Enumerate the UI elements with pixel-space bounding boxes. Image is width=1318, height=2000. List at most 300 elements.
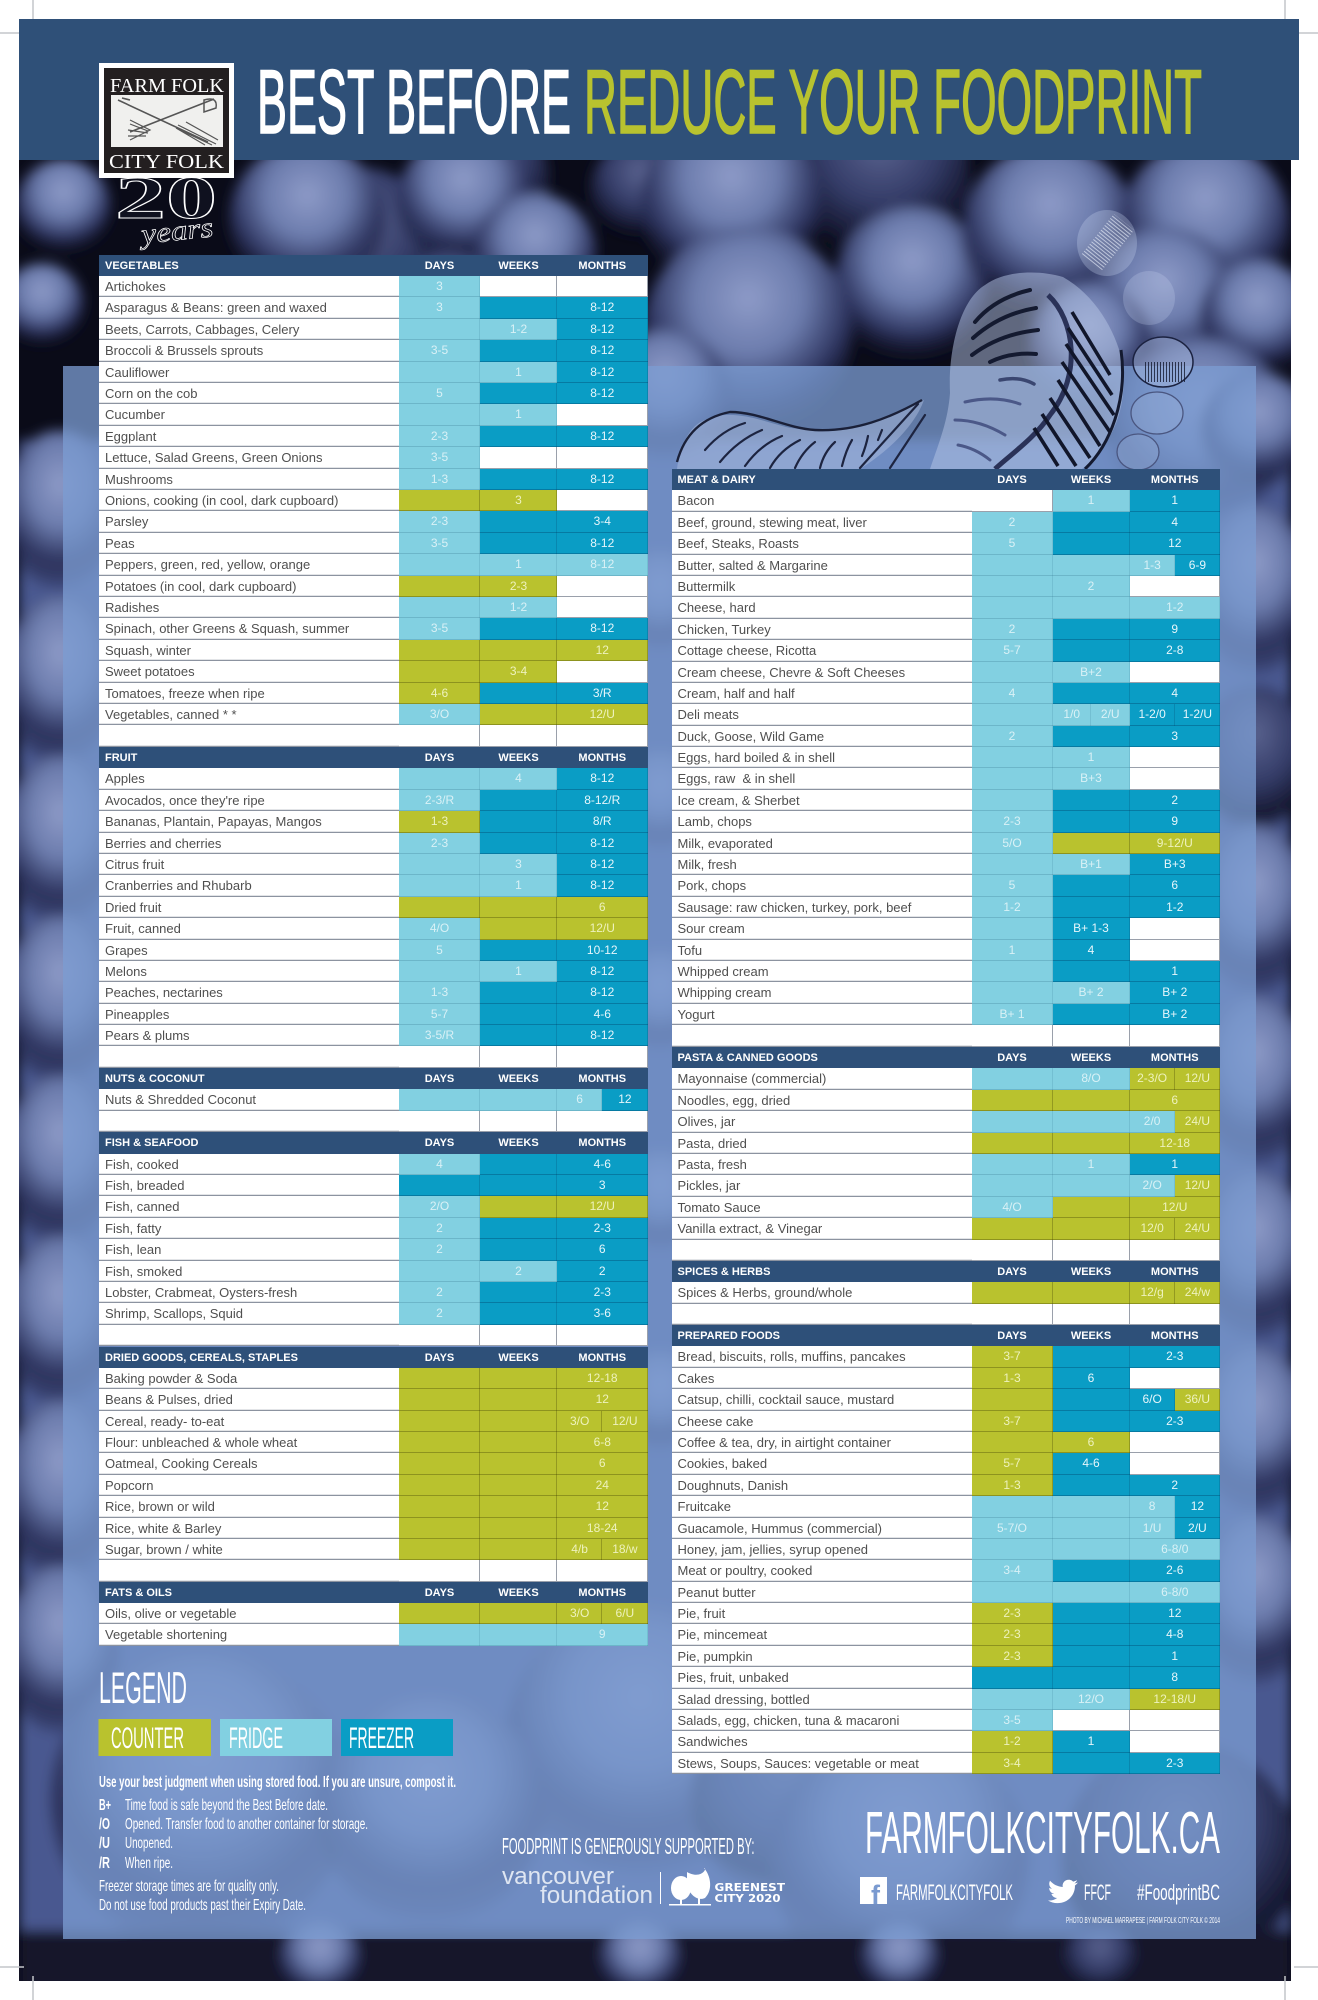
header: nuts: WEEKS <box>498 1073 539 1085</box>
row: oatmeal: Oatmeal, Cooking Cereals <box>105 1456 257 1471</box>
row: bananas <box>99 811 648 833</box>
row: beef ground <box>672 512 1220 533</box>
row: potatoes: 2-3 <box>510 579 527 593</box>
row: pasta fresh: 1 <box>1171 1157 1178 1171</box>
row: mushrooms: Mushrooms <box>105 472 173 487</box>
row: salad dressing: 12/O <box>1078 1692 1104 1706</box>
row: lettuce: 3-5 <box>431 450 448 464</box>
legend notes: /R <box>99 1855 110 1872</box>
row: peaches: 8-12 <box>590 985 614 999</box>
row: squash: Squash, winter <box>105 643 191 658</box>
row: onions <box>99 490 648 511</box>
row: corn: 5 <box>436 386 443 400</box>
row: berries <box>99 833 648 854</box>
row: pickles: 2/O <box>1142 1178 1162 1192</box>
header: pasta: MONTHS <box>1151 1052 1199 1064</box>
row: fish canned: Fish, canned <box>105 1199 179 1214</box>
row: cream: 4 <box>1171 686 1178 700</box>
row: broccoli: 8-12 <box>590 343 614 357</box>
header: meat and dairy: MEAT & DAIRY <box>678 474 756 486</box>
row: pineapples <box>99 1004 648 1025</box>
header: fish: MONTHS <box>578 1137 626 1149</box>
row: cream cheese <box>672 662 1220 683</box>
row: parsley: 3-4 <box>594 514 611 528</box>
header: fats: FATS & OILS <box>105 1587 172 1599</box>
row: tomatoes: 4-6 <box>431 686 448 700</box>
row: mayonnaise: Mayonnaise (commercial) <box>678 1071 826 1086</box>
row: noodles <box>672 1090 1220 1111</box>
icon: twitter <box>1048 1880 1078 1903</box>
row: beef steaks: 5 <box>1009 536 1015 550</box>
header: fruit: MONTHS <box>578 752 626 764</box>
row: fruitcake: 12 <box>1191 1499 1204 1513</box>
row: pears: 3-5/R <box>425 1028 454 1042</box>
row: cream: Cream, half and half <box>678 686 795 701</box>
row: lamb: 9 <box>1171 814 1178 828</box>
row: olives: 24/U <box>1185 1114 1210 1128</box>
row: doughnuts <box>672 1475 1220 1496</box>
row: shortening <box>99 1624 648 1646</box>
header: prepared foods: DAYS <box>997 1330 1027 1342</box>
row: cookies <box>672 1453 1220 1475</box>
row: doughnuts: 2 <box>1171 1478 1178 1492</box>
header: spices: SPICES & HERBS <box>678 1266 770 1278</box>
row: eggs raw: B+3 <box>1080 771 1102 785</box>
row: bananas: Bananas, Plantain, Papayas, Mangos <box>105 814 322 829</box>
header: prepared foods: PREPARED FOODS <box>678 1330 780 1342</box>
row: broccoli <box>99 340 648 362</box>
row: ice cream: 2 <box>1171 793 1178 807</box>
row: grapes: 10-12 <box>587 943 618 957</box>
row: cereal: 12/U <box>612 1414 638 1428</box>
row: baking powder: Baking powder & Soda <box>105 1371 237 1386</box>
header: dried goods: MONTHS <box>578 1352 626 1364</box>
table: dried goods <box>99 1346 648 1582</box>
row: butter: 1-3 <box>1143 558 1161 572</box>
row: cakes: Cakes <box>678 1371 714 1386</box>
header: fruit: WEEKS <box>498 752 539 764</box>
row: radishes <box>99 597 648 618</box>
header: dried goods: WEEKS <box>498 1352 539 1364</box>
row: citrus: Citrus fruit <box>105 857 164 872</box>
row: mushrooms: 8-12 <box>590 472 614 486</box>
row: apples: 8-12 <box>590 771 614 785</box>
row: tomato sauce: 12/U <box>1162 1200 1187 1214</box>
row: citrus: 8-12 <box>590 857 614 871</box>
header: pasta: DAYS <box>997 1052 1027 1064</box>
row: coffee: 6 <box>1088 1435 1094 1449</box>
row: cereal <box>99 1411 648 1432</box>
header: vegetables: VEGETABLES <box>105 260 179 272</box>
row: fish smoked: 2 <box>599 1264 606 1278</box>
row: baking powder: 12-18 <box>587 1371 618 1385</box>
row: pie mincemeat: 4-8 <box>1166 1627 1183 1641</box>
row: ice cream <box>672 790 1220 811</box>
legend notes: Unopened. <box>125 1835 173 1852</box>
row: asparagus: 8-12 <box>590 300 614 314</box>
header: meat and dairy: MONTHS <box>1151 474 1199 486</box>
header: pasta: WEEKS <box>1071 1052 1111 1064</box>
row: pie pumpkin: 1 <box>1171 1649 1178 1663</box>
row: peaches: Peaches, nectarines <box>105 985 223 1000</box>
row: pies unbaked <box>672 1667 1220 1689</box>
table: spices and herbs <box>672 1261 1220 1325</box>
row: eggplant: 2-3 <box>431 429 448 443</box>
header: fats: WEEKS <box>498 1587 539 1599</box>
row: melons: 1 <box>515 964 522 978</box>
row: bacon: Bacon <box>678 493 714 508</box>
row: guacamole: 2/U <box>1188 1521 1207 1535</box>
row: pineapples: Pineapples <box>105 1007 169 1022</box>
row: tofu: 4 <box>1088 943 1094 957</box>
row: sandwiches: Sandwiches <box>678 1734 748 1749</box>
row: fruit canned <box>99 918 648 940</box>
row: beef steaks: Beef, Steaks, Roasts <box>678 536 799 551</box>
row: rice white <box>99 1518 648 1539</box>
legend notes <box>99 1774 456 1914</box>
row: sweet potatoes <box>99 661 648 683</box>
row: potatoes: Potatoes (in cool, dark cupboard) <box>105 579 296 594</box>
row: olives <box>672 1111 1220 1133</box>
icon: crossed fork and spade <box>118 98 218 145</box>
row: fish fatty: 2-3 <box>594 1221 611 1235</box>
row: pork: 6 <box>1171 878 1178 892</box>
row: duck: 3 <box>1171 729 1178 743</box>
row: melons <box>99 961 648 982</box>
row: ice cream: Ice cream, & Sherbet <box>678 793 800 808</box>
row: cauliflower: Cauliflower <box>105 365 169 380</box>
header: fish: DAYS <box>425 1137 454 1149</box>
row: fish lean: 6 <box>599 1242 606 1256</box>
row: apples <box>99 768 648 790</box>
row: cottage cheese: Cottage cheese, Ricotta <box>678 643 816 658</box>
row: eggs hard: 1 <box>1088 750 1094 764</box>
row: cottage cheese: 5-7 <box>1003 643 1021 657</box>
row: asparagus: Asparagus & Beans: green and waxed <box>105 300 327 315</box>
row: eggplant <box>99 426 648 447</box>
row: buttermilk: 2 <box>1088 579 1094 593</box>
header band <box>19 19 1299 160</box>
row: vanilla: Vanilla extract, & Vinegar <box>678 1221 822 1236</box>
footer: supporters and contact: FFCF <box>1084 1880 1111 1905</box>
row: bread: 3-7 <box>1003 1349 1021 1363</box>
row: rice brown: 12 <box>596 1499 609 1513</box>
row: vegetables canned: 3/O <box>430 707 449 721</box>
row: bacon <box>672 490 1220 512</box>
legend key: counter <box>98 1719 211 1756</box>
legend notes: Do not use food products past their Expiry Date. <box>99 1897 306 1914</box>
row: noodles: 6 <box>1171 1093 1178 1107</box>
row: sugar: 18/w <box>612 1542 638 1556</box>
legend notes: When ripe. <box>125 1855 173 1872</box>
row: beef steaks <box>672 533 1220 555</box>
row: spinach: 8-12 <box>590 621 614 635</box>
row: fish canned: 12/U <box>590 1199 615 1213</box>
row: cheese hard <box>672 597 1220 619</box>
row: pickles <box>672 1175 1220 1197</box>
row: chicken: 2 <box>1009 622 1015 636</box>
row: pie pumpkin <box>672 1646 1220 1667</box>
row: sour cream <box>672 918 1220 940</box>
row: eggs hard: Eggs, hard boiled & in shell <box>678 750 835 765</box>
row: fish smoked: Fish, smoked <box>105 1264 182 1279</box>
row: sugar: 4/b <box>571 1542 588 1556</box>
row: cookies: 5-7 <box>1003 1456 1021 1470</box>
row: cream cheese: B+2 <box>1080 665 1102 679</box>
row: mayonnaise <box>672 1068 1220 1090</box>
row: pears: 8-12 <box>590 1028 614 1042</box>
row: stews: Stews, Soups, Sauces: vegetable or meat <box>678 1756 919 1771</box>
row: rice brown <box>99 1496 648 1518</box>
row: nuts: 12 <box>618 1092 632 1106</box>
row: peppers: 1 <box>515 557 522 571</box>
row: tomatoes: 3/R <box>593 686 612 700</box>
row: rice brown: Rice, brown or wild <box>105 1499 215 1514</box>
row: parsley: Parsley <box>105 514 148 529</box>
row: rice white: 18-24 <box>587 1521 618 1535</box>
row: cakes: 1-3 <box>1003 1371 1021 1385</box>
row: butter <box>672 555 1220 576</box>
table: fish and seafood <box>99 1132 648 1346</box>
header: fish: FISH & SEAFOOD <box>105 1137 199 1149</box>
row: cream <box>672 683 1220 704</box>
row: honey: 6-8/0 <box>1161 1542 1188 1556</box>
row: citrus <box>99 854 648 875</box>
row: cheese hard: 1-2 <box>1166 600 1183 614</box>
row: meat or poultry: 2-6 <box>1166 1563 1183 1577</box>
header: nuts: NUTS & COCONUT <box>105 1073 205 1085</box>
row: lobster <box>99 1282 648 1303</box>
row: fish breaded: Fish, breaded <box>105 1178 184 1193</box>
row: butter: 6-9 <box>1189 558 1206 572</box>
row: guacamole <box>672 1518 1220 1539</box>
row: lettuce: Lettuce, Salad Greens, Green Onions <box>105 450 323 465</box>
row: tomato sauce: Tomato Sauce <box>678 1200 761 1215</box>
header: dried goods: DAYS <box>425 1352 454 1364</box>
row: tomato sauce <box>672 1197 1220 1218</box>
row: milk evaporated: 5/O <box>1002 836 1022 850</box>
row: asparagus: 3 <box>436 300 443 314</box>
row: guacamole: 1/U <box>1143 1521 1161 1535</box>
row: cereal: Cereal, ready- to-eat <box>105 1414 224 1429</box>
row: meat or poultry: 3-4 <box>1003 1563 1021 1577</box>
row: corn: Corn on the cob <box>105 386 198 401</box>
header: dried goods: DRIED GOODS, CEREALS, STAPLES <box>105 1352 298 1364</box>
header: fish <box>99 1132 648 1154</box>
row: stews: 2-3 <box>1166 1756 1183 1770</box>
row: chicken: 9 <box>1171 622 1178 636</box>
row: avocados: 8-12/R <box>584 793 620 807</box>
row: lobster: 2-3 <box>594 1285 611 1299</box>
row: fruitcake: 8 <box>1149 1499 1155 1513</box>
row: sausage: Sausage: raw chicken, turkey, pork, beef <box>678 900 911 915</box>
row: beef ground: Beef, ground, stewing meat, liver <box>678 515 867 530</box>
header: meat and dairy <box>672 469 1220 490</box>
legend notes: B+ <box>99 1797 111 1814</box>
row: doughnuts: 1-3 <box>1003 1478 1021 1492</box>
logo: vancouver foundation: vancouver <box>502 1863 614 1890</box>
row: peanut butter <box>672 1582 1220 1603</box>
row: avocados: Avocados, once they're ripe <box>105 793 265 808</box>
table: meat and dairy <box>672 469 1220 1047</box>
table: fats and oils <box>99 1582 648 1646</box>
row: eggs hard <box>672 747 1220 768</box>
row: cream: 4 <box>1009 686 1015 700</box>
row: milk fresh: B+3 <box>1164 857 1186 871</box>
row: cottage cheese <box>672 640 1220 662</box>
row: eggs raw <box>672 768 1220 790</box>
row: pasta fresh: Pasta, fresh <box>678 1157 747 1172</box>
header: prepared foods <box>672 1325 1220 1346</box>
row: eggplant: 8-12 <box>590 429 614 443</box>
row: grapes: Grapes <box>105 943 148 958</box>
row: yogurt <box>672 1004 1220 1025</box>
row: popcorn: Popcorn <box>105 1478 153 1493</box>
row: cheese cake <box>672 1411 1220 1432</box>
row: whipped cream: 1 <box>1171 964 1178 978</box>
row: baking powder <box>99 1368 648 1389</box>
row: beets: 8-12 <box>590 322 614 336</box>
row: beets: 1-2 <box>510 322 527 336</box>
row: buttermilk <box>672 576 1220 597</box>
row: sausage: 1-2 <box>1003 900 1021 914</box>
row: broccoli: 3-5 <box>431 343 448 357</box>
header: vegetables: DAYS <box>425 260 454 272</box>
row: fish cooked: 4 <box>436 1157 443 1171</box>
header: prepared foods: WEEKS <box>1071 1330 1111 1342</box>
row: peas: 8-12 <box>590 536 614 550</box>
header: spices: WEEKS <box>1071 1266 1111 1278</box>
row: cranberries: Cranberries and Rhubarb <box>105 878 252 893</box>
row: olives: 2/0 <box>1144 1114 1160 1128</box>
row: spices: Spices & Herbs, ground/whole <box>678 1285 852 1300</box>
row: coffee <box>672 1432 1220 1453</box>
row: milk fresh: B+1 <box>1080 857 1102 871</box>
row: sour cream: Sour cream <box>678 921 745 936</box>
row: honey: Honey, jam, jellies, syrup opened <box>678 1542 868 1557</box>
row: sugar <box>99 1539 648 1560</box>
row: sandwiches: 1-2 <box>1003 1734 1021 1748</box>
header: prepared foods: MONTHS <box>1151 1330 1199 1342</box>
row: sandwiches: 1 <box>1088 1734 1094 1748</box>
row: shrimp: 2 <box>436 1306 443 1320</box>
header: dried goods <box>99 1346 648 1368</box>
logo: Farm Folk City Folk 20 years: years <box>136 212 215 251</box>
row: lamb: 2-3 <box>1003 814 1021 828</box>
logo: greenest city 2020: CITY 2020 <box>714 1893 780 1905</box>
row: salads: 3-5 <box>1003 1713 1021 1727</box>
row: parsley: 2-3 <box>431 514 448 528</box>
header: fats <box>99 1582 648 1603</box>
row: deli meats: 1/0 <box>1063 707 1080 721</box>
row: mayonnaise: 12/U <box>1185 1071 1210 1085</box>
header: meat and dairy: DAYS <box>997 474 1027 486</box>
row: peas: Peas <box>105 536 135 551</box>
row: fish smoked: 2 <box>515 1264 522 1278</box>
row: deli meats: 1-2/0 <box>1138 707 1166 721</box>
row: catsup <box>672 1389 1220 1411</box>
row: bread: Bread, biscuits, rolls, muffins, pancakes <box>678 1349 906 1364</box>
row: fish cooked <box>99 1154 648 1175</box>
row: lettuce <box>99 447 648 469</box>
row: tomatoes: Tomatoes, freeze when ripe <box>105 686 265 700</box>
logo: vancouver foundation: foundation <box>540 1882 653 1909</box>
header: fruit <box>99 747 648 768</box>
row: fish canned: 2/O <box>430 1199 449 1213</box>
row: grapes <box>99 940 648 961</box>
translucent panel behind tables <box>63 366 1256 1939</box>
row: asparagus <box>99 297 648 319</box>
row: pie fruit <box>672 1603 1220 1624</box>
row: fish fatty: 2 <box>436 1221 443 1235</box>
row: fruit canned: 4/O <box>430 921 449 935</box>
row: whipped cream <box>672 961 1220 982</box>
logo: vancouver foundation <box>502 1863 653 1909</box>
icon: facebook <box>860 1877 887 1910</box>
row: melons: Melons <box>105 964 147 979</box>
row: fruitcake: Fruitcake <box>678 1499 731 1514</box>
row: popcorn <box>99 1475 648 1496</box>
footer: supporters and contact: FOODPRINT IS GENEROUSLY SUPPORTED BY: <box>502 1833 754 1859</box>
row: vanilla: 12/0 <box>1140 1221 1164 1235</box>
header: spices: MONTHS <box>1151 1266 1199 1278</box>
row: pineapples: 5-7 <box>431 1007 448 1021</box>
header: fruit: FRUIT <box>105 752 137 764</box>
row: pasta fresh <box>672 1154 1220 1175</box>
row: chicken <box>672 619 1220 640</box>
row: beets <box>99 319 648 340</box>
row: meat or poultry: Meat or poultry, cooked <box>678 1563 812 1578</box>
row: milk evaporated <box>672 833 1220 854</box>
row: corn: 8-12 <box>590 386 614 400</box>
header: fruit: DAYS <box>425 752 454 764</box>
row: whipping cream: Whipping cream <box>678 985 771 1000</box>
row: eggplant: Eggplant <box>105 429 156 444</box>
row: peanut butter: Peanut butter <box>678 1585 756 1600</box>
row: fish breaded: 3 <box>599 1178 606 1192</box>
row: beans <box>99 1389 648 1411</box>
row: lamb: Lamb, chops <box>678 814 752 829</box>
row: cranberries: 1 <box>515 878 522 892</box>
row: radishes: Radishes <box>105 600 159 615</box>
legend key: freezer: FREEZER <box>349 1722 414 1755</box>
row: salads <box>672 1710 1220 1731</box>
row: pineapples: 4-6 <box>594 1007 611 1021</box>
row: fish canned <box>99 1196 648 1218</box>
photo credit: PHOTO BY MICHAEL MARRAPESE | FARM FOLK CITY FOLK © 2014 <box>1066 1916 1220 1925</box>
row: beets: Beets, Carrots, Cabbages, Celery <box>105 322 299 337</box>
row: sweet potatoes: Sweet potatoes <box>105 664 195 679</box>
row: rice white: Rice, white & Barley <box>105 1521 221 1536</box>
row: sour cream: B+ 1-3 <box>1073 921 1109 935</box>
header: spices <box>672 1261 1220 1282</box>
legend notes: Use your best judgment when using stored food. If you are unsure, compost it. <box>99 1774 456 1791</box>
row: cakes <box>672 1368 1220 1389</box>
row: berries: Berries and cherries <box>105 836 221 851</box>
row: parsley <box>99 511 648 533</box>
row: grapes: 5 <box>436 943 443 957</box>
row: pork: Pork, chops <box>678 878 746 893</box>
row: catsup: Catsup, chilli, cocktail sauce, mustard <box>678 1392 894 1407</box>
row: berries: 8-12 <box>590 836 614 850</box>
row: cereal: 3/O <box>570 1414 589 1428</box>
row: stews <box>672 1753 1220 1774</box>
row: squash: 12 <box>596 643 609 657</box>
row: peppers: Peppers, green, red, yellow, orange <box>105 557 310 572</box>
row: meat or poultry <box>672 1560 1220 1582</box>
row: bananas: 1-3 <box>431 814 448 828</box>
row: beef steaks: 12 <box>1168 536 1181 550</box>
